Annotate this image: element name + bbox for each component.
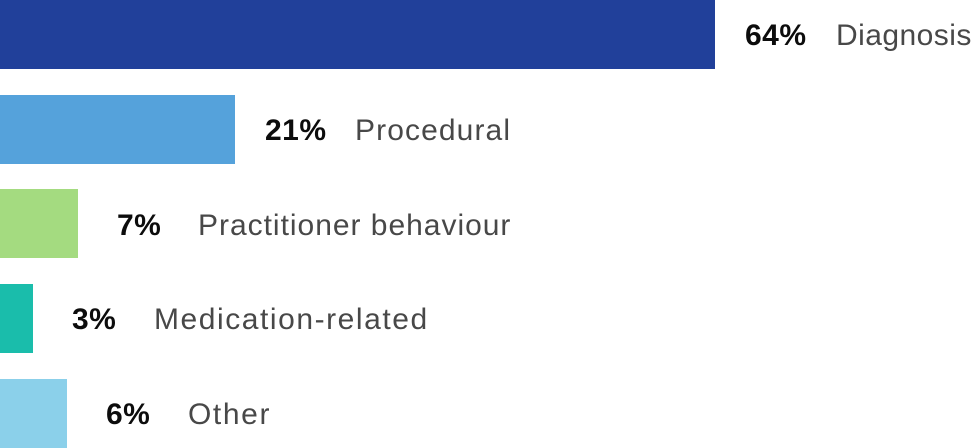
value: 21%: 21% (265, 114, 327, 147)
bar: Practitioner behaviour (0, 189, 78, 258)
label: Medication-related: Medication-related (154, 303, 429, 336)
value: 7%: 7% (117, 209, 161, 242)
bar: Other (0, 379, 67, 448)
value: 64%: 64% (745, 19, 807, 52)
label: Practitioner behaviour: Practitioner behaviour (198, 209, 511, 242)
row: Other 6% (0, 379, 271, 448)
bar: Medication-related (0, 284, 33, 353)
bar: Procedural (0, 95, 234, 164)
value: 3%: 3% (72, 303, 116, 336)
row: Procedural 21% (0, 95, 511, 164)
label: Diagnosis: Diagnosis (836, 19, 972, 52)
label: Other: Other (188, 398, 271, 431)
value: 6%: 6% (106, 398, 150, 431)
row: Practitioner behaviour 7% (0, 189, 511, 258)
row: Diagnosis 64% (0, 0, 972, 69)
label: Procedural: Procedural (355, 114, 511, 147)
row: Medication-related 3% (0, 284, 429, 353)
bar: Diagnosis (0, 0, 715, 69)
